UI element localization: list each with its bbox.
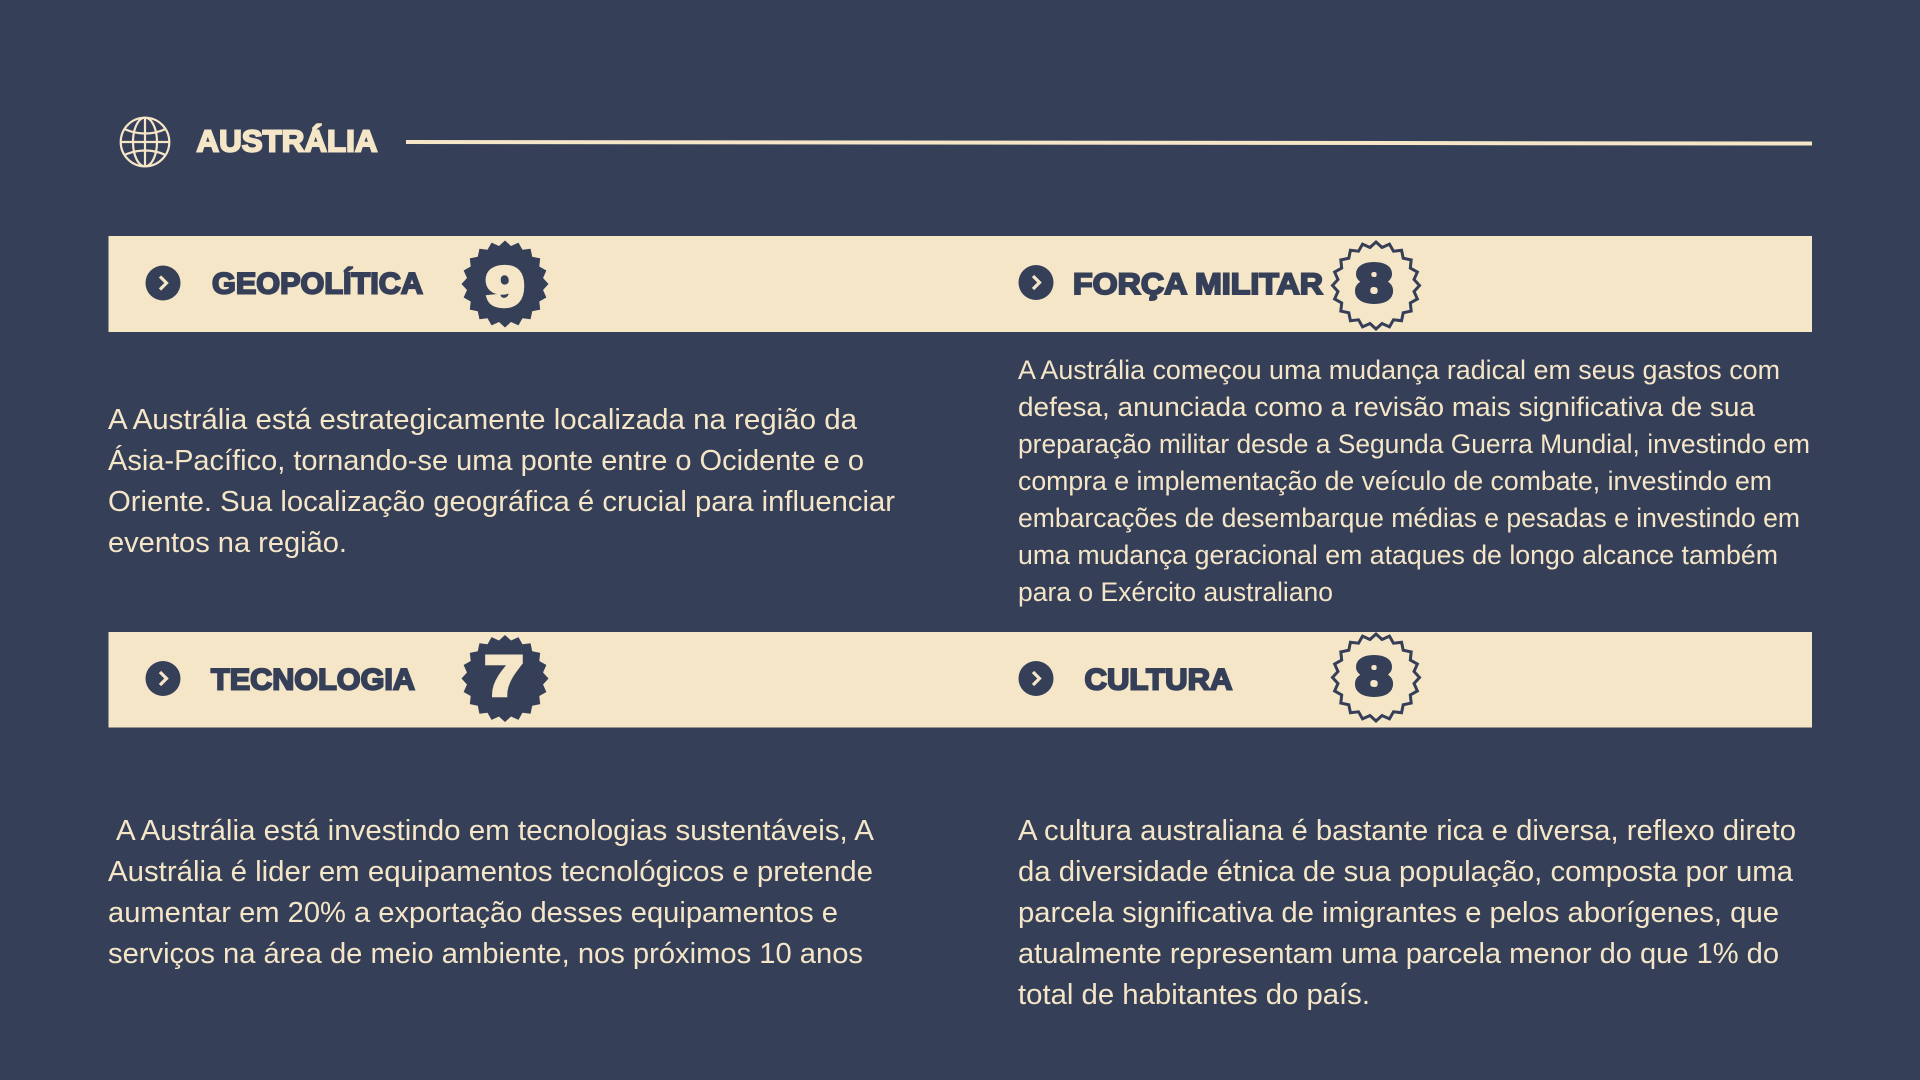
score badge: 7: 7	[485, 644, 523, 707]
heading: GEOPOLÍTICA	[212, 266, 423, 300]
icon: arrow	[1018, 265, 1054, 300]
text block: cultura: total de habitantes do país.	[1018, 979, 1370, 1011]
text block: geopolítica: eventos na região.	[108, 527, 347, 559]
text block: tecnologia: A Austrália está investindo em tecnologias sustentáveis, A	[116, 815, 874, 847]
panel: geopolítica header	[108, 236, 1812, 332]
heading: FORÇA MILITAR	[1073, 268, 1323, 301]
text block: tecnologia	[108, 815, 874, 970]
bar	[108, 632, 1812, 728]
text block: cultura: da diversidade étnica de sua população, composta por uma	[1018, 856, 1793, 888]
score badge: 8: 8	[1356, 648, 1392, 706]
score badge: 9: 9	[486, 256, 524, 318]
score badge: 8	[1332, 242, 1420, 329]
icon: arrow	[1018, 661, 1054, 696]
score badge: 8	[1332, 634, 1420, 721]
text block: cultura: A cultura australiana é bastante rica e diversa, reflexo direto	[1018, 815, 1796, 847]
score badge: 9	[462, 240, 548, 328]
heading: CULTURA	[1084, 664, 1232, 696]
score badge: 7	[462, 635, 548, 722]
text block: cultura: atualmente representam uma parcela menor do que 1% do	[1018, 938, 1779, 970]
panel: tecnologia header	[108, 632, 1812, 728]
text block: geopolítica	[108, 404, 896, 559]
icon: arrow	[146, 661, 180, 696]
text block: força militar: A Austrália começou uma mudança radical em seus gastos com	[1018, 355, 1780, 385]
icon: arrow	[146, 266, 180, 300]
heading: TECNOLOGIA	[211, 664, 415, 696]
text block: cultura: parcela significativa de imigrantes e pelos aborígenes, que	[1018, 897, 1779, 929]
text block: tecnologia: Austrália é lider em equipamentos tecnológicos e pretende	[108, 856, 873, 888]
text block: geopolítica: Oriente. Sua localização geográfica é crucial para influenciar	[108, 486, 896, 518]
text block: tecnologia: serviços na área de meio ambiente, nos próximos 10 anos	[108, 938, 863, 970]
text block: força militar: preparação militar desde a Segunda Guerra Mundial, investindo em	[1018, 429, 1810, 459]
text block: força militar: uma mudança geracional em ataques de longo alcance também	[1018, 540, 1778, 570]
text block: força militar: compra e implementação de veículo de combate, investindo em	[1018, 466, 1772, 496]
icon: globe	[121, 118, 169, 166]
bar	[108, 236, 1812, 332]
panel: força militar header	[1018, 242, 1420, 329]
text block: geopolítica: A Austrália está estrategicamente localizada na região da	[108, 404, 857, 436]
panel: cultura header	[1018, 634, 1420, 721]
title rule	[406, 142, 1812, 144]
header	[121, 118, 1812, 166]
text block: geopolítica: Ásia-Pacífico, tornando-se uma ponte entre o Ocidente e o	[108, 445, 864, 477]
title: AUSTRÁLIA	[196, 124, 378, 158]
score badge: 8: 8	[1356, 255, 1392, 313]
text block: força militar: para o Exército australiano	[1018, 577, 1333, 607]
text block: cultura	[1018, 815, 1796, 1011]
text block: força militar	[1018, 355, 1810, 607]
text block: força militar: embarcações de desembarque médias e pesadas e investindo em	[1018, 503, 1800, 533]
text block: tecnologia: aumentar em 20% a exportação desses equipamentos e	[108, 897, 838, 929]
text block: força militar: defesa, anunciada como a revisão mais significativa de sua	[1018, 392, 1755, 422]
